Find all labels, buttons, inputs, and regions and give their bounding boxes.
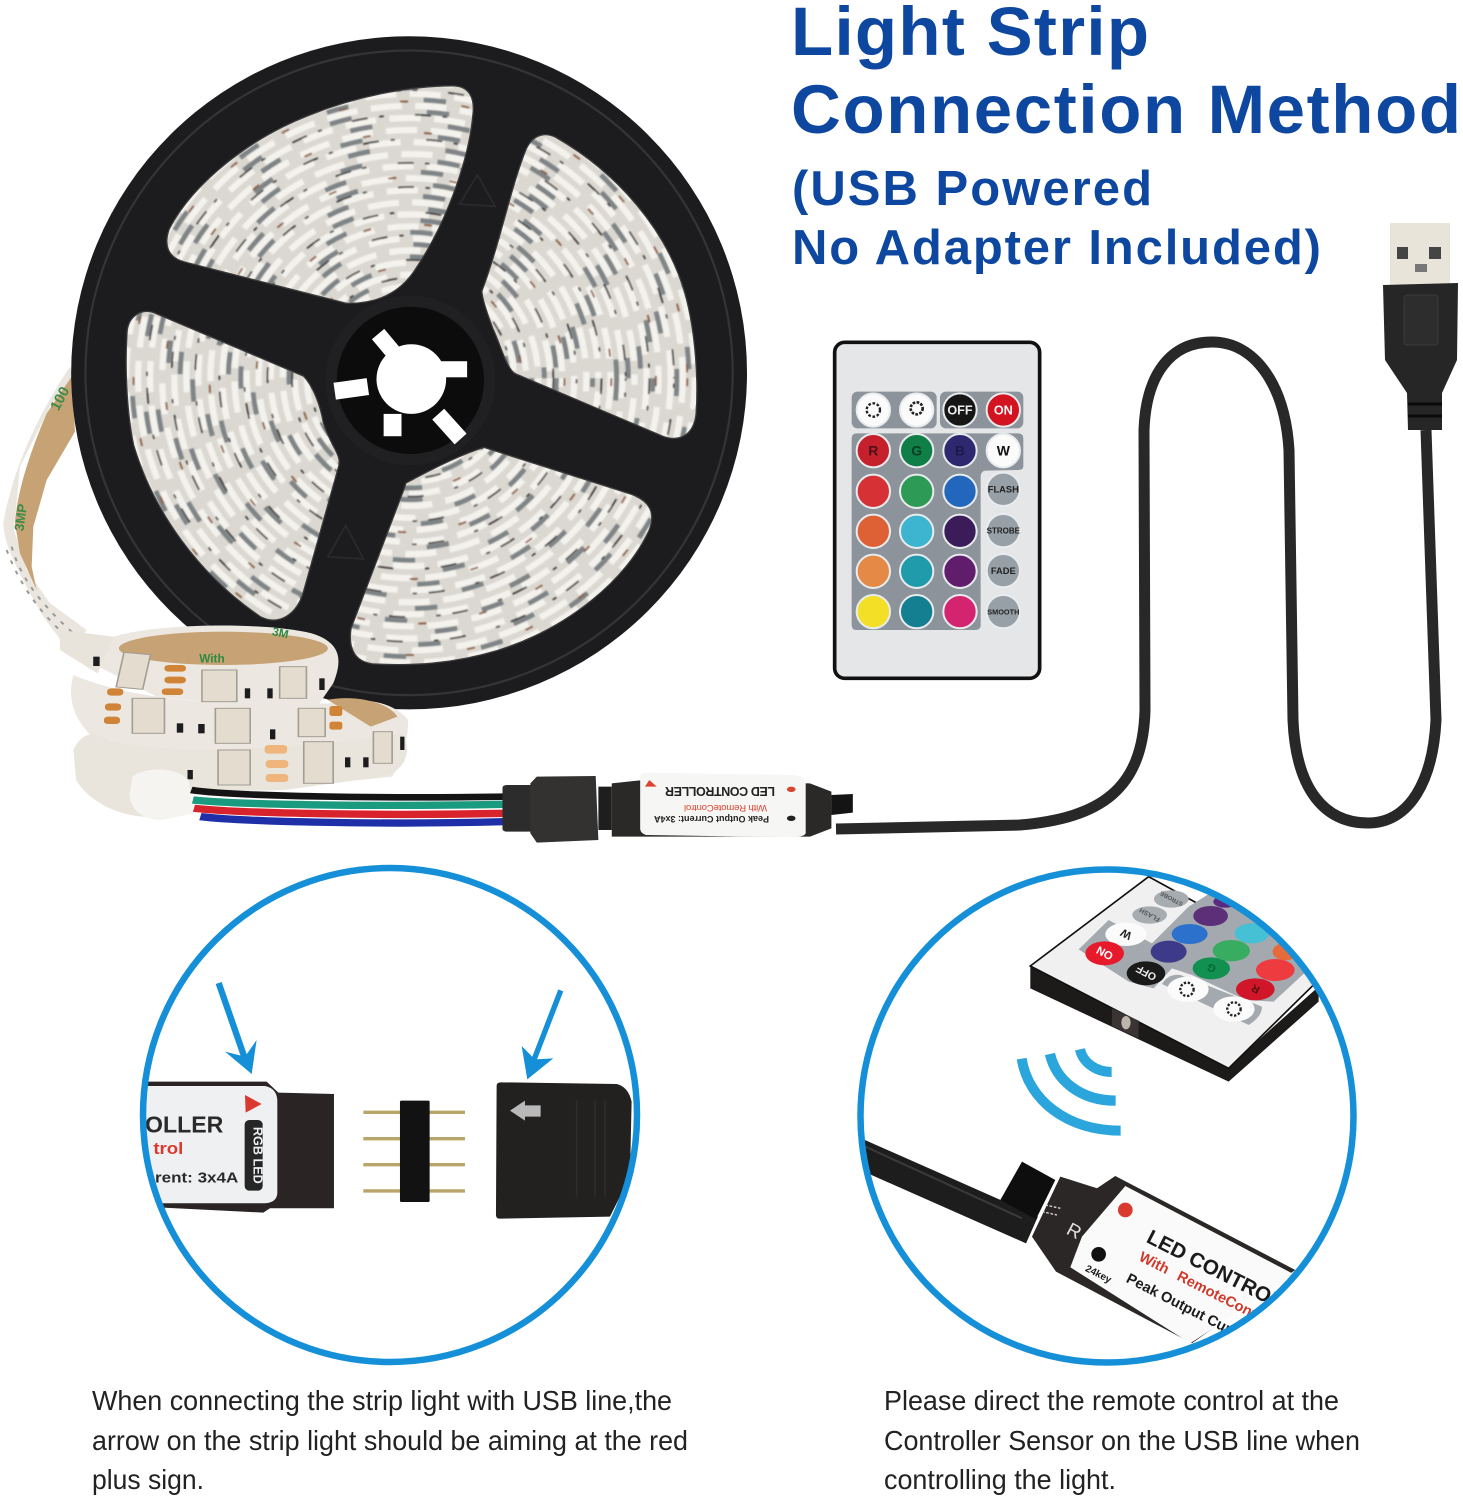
tilted remote labels: OFF (1134, 962, 1159, 983)
caption left: When connecting the strip light with USB line,the (92, 1385, 672, 1416)
arrow left (216, 982, 257, 1074)
controller label text (654, 784, 775, 824)
coiled LED strip (60, 625, 853, 843)
title: No Adapter Included) (792, 221, 1321, 275)
bottom band (73, 733, 407, 817)
controller body: Peak Output Current (1123, 1271, 1259, 1350)
coiled LED strip: With (199, 653, 225, 666)
controller body: RemoteControl (1174, 1269, 1276, 1331)
circle: connector detail (143, 982, 632, 1219)
button labels: SMOOTH (987, 607, 1019, 616)
controller end (143, 1082, 334, 1213)
arrow right (522, 989, 563, 1079)
circle: remote sensor detail (859, 877, 1325, 1350)
tilted remote (1030, 877, 1325, 1082)
caption right: Please direct the remote control at the (884, 1385, 1339, 1416)
warning triangle (245, 1095, 262, 1113)
controller label text: Peak Output Current: 3x4A (654, 814, 769, 824)
tilted remote labels: ON (1095, 943, 1115, 962)
controller body: R (1063, 1218, 1085, 1243)
LED strip windows (126, 86, 696, 664)
LED reel (60, 30, 756, 726)
button labels: G (911, 443, 922, 459)
controller body (1000, 1162, 1323, 1350)
caption left: plus sign. (92, 1464, 204, 1495)
ring right (860, 870, 1354, 1362)
caption right: Controller Sensor on the USB line when (884, 1425, 1360, 1456)
USB cable (836, 342, 1436, 829)
inline connector (502, 776, 853, 843)
socket end (496, 1082, 632, 1219)
middle band (71, 675, 408, 787)
RGB wires (191, 790, 505, 823)
copper pads (104, 665, 342, 730)
button labels: R (868, 443, 878, 459)
controller label shape (640, 773, 806, 837)
title: (USB Powered (792, 162, 1152, 216)
button labels: STROBE (987, 527, 1021, 536)
title: Connection Method (791, 71, 1461, 148)
recycling marks (328, 175, 495, 559)
RGB LED tag (245, 1120, 265, 1191)
tilted remote labels: R (1249, 981, 1262, 996)
coiled LED strip: 3M (271, 625, 290, 641)
ring left (143, 868, 637, 1362)
controller body: 24key (1083, 1263, 1113, 1286)
controller end: OLLER (145, 1111, 223, 1137)
remote control (835, 342, 1040, 678)
RGB LED tag: RGB LED (251, 1127, 265, 1184)
caption left: arrow on the strip light should be aiming at the red (92, 1425, 688, 1456)
loose strip behind reel: 3MP (11, 503, 30, 532)
tilted remote labels: W (1119, 925, 1134, 941)
controller body: LED CONTROLLER (1143, 1226, 1323, 1333)
controller label text: With RemoteControl (684, 802, 767, 813)
remote buttons (857, 393, 1020, 628)
4-pin connector (363, 1101, 465, 1202)
controller end: trol (153, 1139, 183, 1158)
USB plug (1383, 223, 1458, 430)
power cable (859, 1153, 1032, 1230)
button labels (867, 402, 1021, 616)
loose strip behind reel: 100 (48, 384, 73, 414)
white wire sleeve (130, 770, 194, 820)
button labels: ON (994, 404, 1013, 418)
top coil (92, 626, 338, 707)
signal waves (1022, 1049, 1121, 1131)
controller label text: LED CONTROLLER (665, 784, 775, 798)
LED chips (116, 652, 392, 785)
button labels: OFF (947, 404, 973, 418)
tilted remote labels: G (1205, 960, 1218, 975)
button labels: W (997, 443, 1011, 459)
caption right (884, 1385, 1360, 1495)
remote buttons tilted (1085, 890, 1298, 1022)
reel body (71, 36, 747, 709)
button labels: FADE (991, 566, 1016, 576)
IR sensor (1112, 1008, 1139, 1038)
button labels: B (955, 443, 965, 459)
resistors (93, 657, 404, 779)
button labels: FLASH (988, 485, 1019, 495)
loose strip behind reel (3, 367, 87, 655)
caption left (92, 1385, 688, 1495)
caption right: controlling the light. (884, 1464, 1116, 1495)
window outlines (126, 86, 697, 665)
controller body: With (1136, 1249, 1172, 1278)
tilted remote labels: FLASH (1138, 906, 1161, 923)
tilted remote labels (1095, 889, 1262, 996)
title (791, 0, 1461, 275)
controller end: rent: 3x4A (155, 1171, 239, 1187)
tilted remote labels: STROBE (1160, 889, 1184, 906)
reel hub (326, 296, 495, 465)
